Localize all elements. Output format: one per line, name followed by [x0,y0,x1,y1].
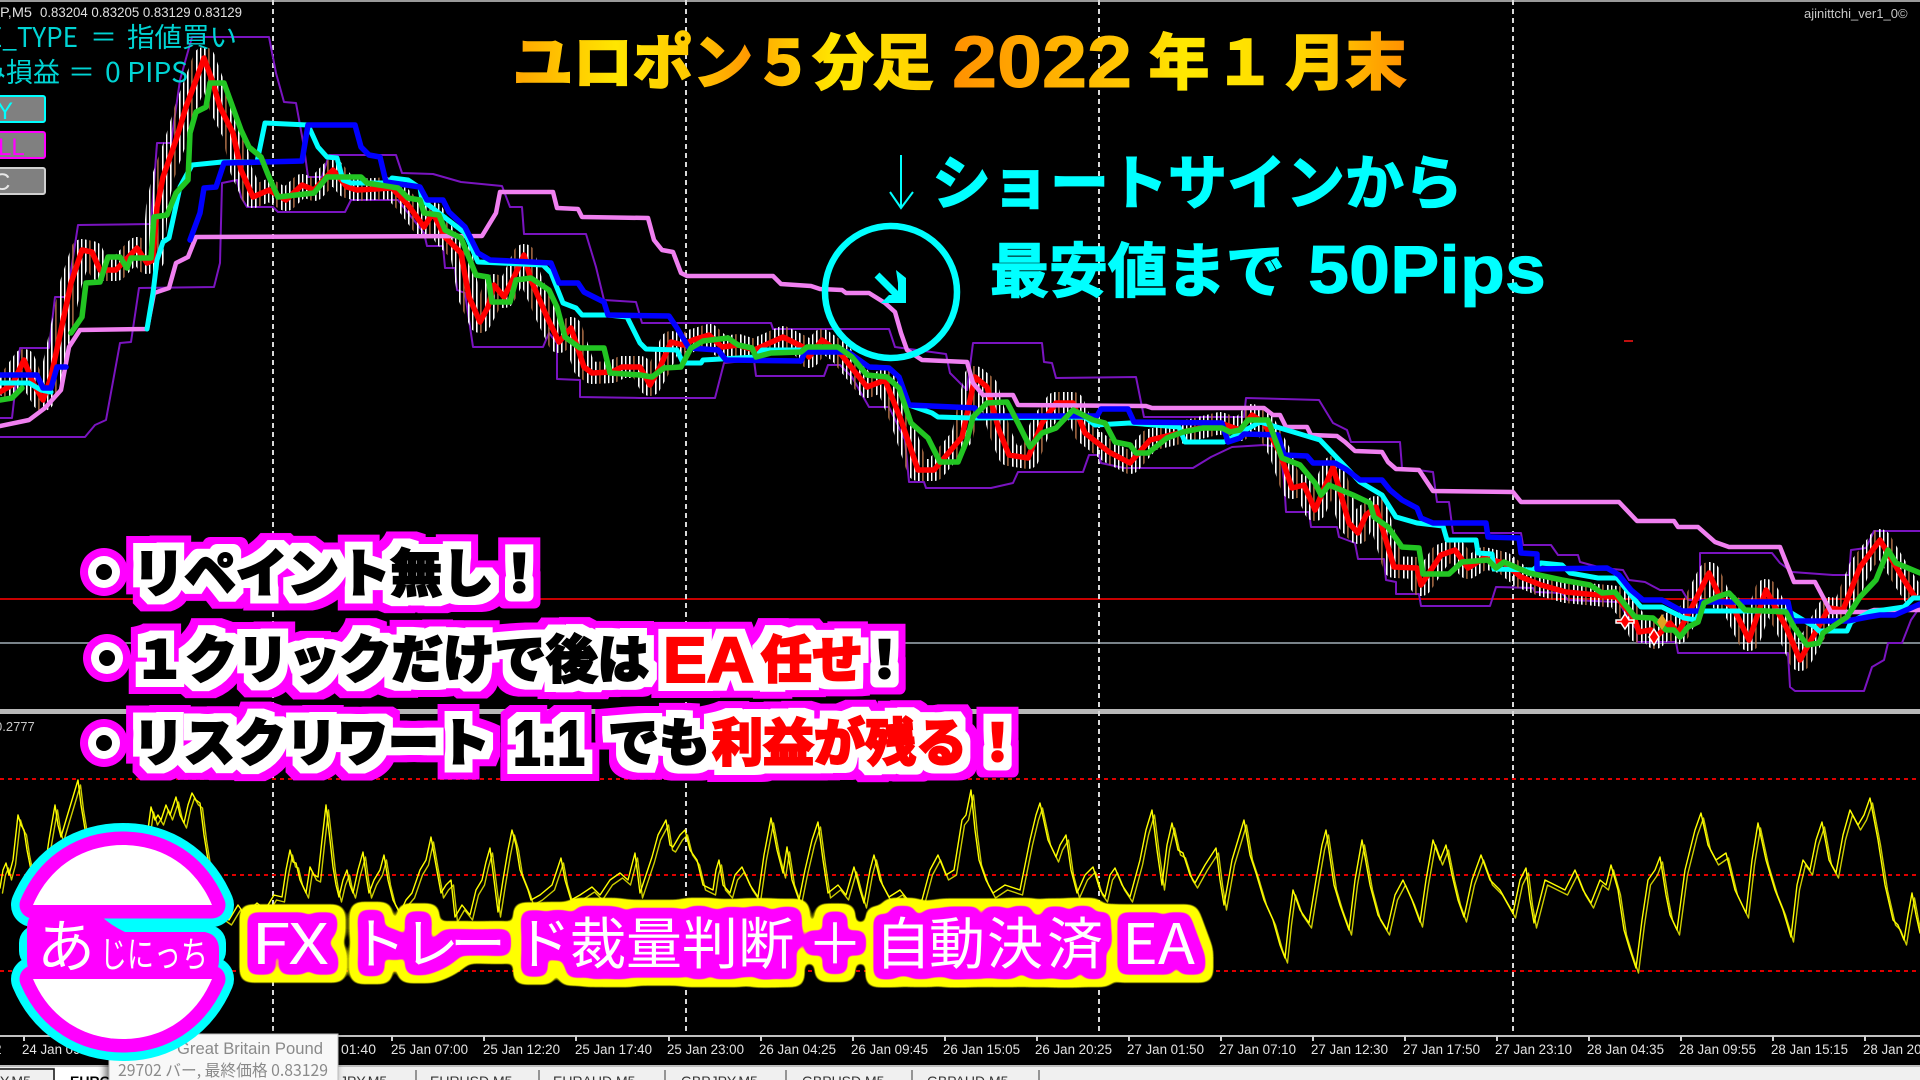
feature: one click: 任せ [761,619,863,693]
banner: FX trade discretion plus auto close EA: ト [350,900,406,981]
button: sell [0,132,45,161]
red fast average [0,58,1915,660]
logo top dome [33,845,212,905]
upper channel line [0,37,1920,600]
logo bottom dome [33,979,212,1039]
feature: risk reward [133,702,1023,779]
axis labels: 26 Jan 15:05 [943,1042,1020,1057]
feature: risk reward: リスクリワート [133,702,490,776]
feature list with outlined text [133,532,1023,779]
axis labels: 25 Jan 07:00 [391,1042,468,1057]
axis labels: 25 Jan 17:40 [575,1042,652,1057]
banner: FX trade discretion plus auto close EA: EA [1122,900,1195,981]
callout: short signal text line 2: 50Pips [1308,232,1546,308]
axis labels: 28 Jan 15:15 [1771,1042,1848,1057]
price chart: channel lines, candles and moving averages [0,37,1920,691]
chart header: symbol and prices: P,M5 [0,5,32,20]
arrow: down to signal [890,155,913,208]
callout: short signal text line 2 [990,224,1546,309]
blue average [0,125,1920,621]
signal markers [1616,614,1667,645]
axis labels: 24 Jan 09:00 [22,1042,99,1057]
axis labels: 27 Jan 17:50 [1403,1042,1480,1057]
oscillator level lines [0,779,1920,971]
axis ticks [24,1036,1865,1041]
title [513,15,1406,103]
banner: FX trade discretion plus auto close EA: ド [515,900,571,981]
axis labels: 27 Jan 23:10 [1495,1042,1572,1057]
feature: risk reward: 利益が残る [712,702,967,776]
banner: FX trade discretion plus auto close EA: 自 [875,900,931,981]
vertical period separators [273,0,1513,1035]
callout: short signal text line 1: ショートサインから [932,136,1463,221]
candlestick wicks [0,58,1915,660]
logo wordmark: じにっち [100,926,208,978]
bullet markers [80,548,131,767]
feature: one click: EA [663,624,754,696]
axis labels: 27 Jan 12:30 [1311,1042,1388,1057]
title: １ [1215,15,1275,102]
axis labels: 28 Jan 09:55 [1679,1042,1756,1057]
title: 月末 [1286,15,1406,102]
feature: risk reward: ！ [972,702,1023,776]
banner: FX trade discretion plus auto close EA: 決 [987,900,1043,981]
axis labels: 26 Jan 20:25 [1035,1042,1112,1057]
feature: risk reward: でも [608,702,710,776]
banner: FX trade discretion plus auto close EA: 済 [1047,900,1103,981]
feature: risk reward: 1:1 [513,707,585,779]
axis labels [0,1042,1920,1057]
axis labels: 26 Jan 09:45 [851,1042,928,1057]
chart header: symbol and prices: 0.83204 0.83205 0.83129 0.83129 [40,5,242,20]
axis labels: 26 Jan 04:25 [759,1042,836,1057]
banner: FX trade discretion plus auto close EA: ー [450,900,506,981]
tooltip [109,1034,338,1080]
banner: FX trade discretion plus auto close EA: 動 [929,900,985,981]
axis labels: 01:40 [341,1042,376,1057]
axis labels: 27 Jan 07:10 [1219,1042,1296,1057]
order type readout: ＝ [90,16,117,55]
feature: one click: ！ [859,619,910,693]
banner: FX trade discretion plus auto close EA: FX [251,900,329,981]
button: buy [0,96,45,125]
logo badge: ajinittchi [19,845,226,1039]
cyan average [0,123,1920,631]
logo wordmark: あ [37,900,95,984]
title: ユロポン５分足 [513,15,933,102]
button: close [0,168,45,196]
tooltip: Great Britain Pound [177,1039,323,1058]
profit and loss readout: 0 PIPS [105,51,188,90]
banner: FX trade discretion plus auto close EA: ＋ [807,900,863,981]
horizontal price levels [0,598,1920,714]
pink slow average [0,192,1920,612]
axis labels: 28 Jan 04:35 [1587,1042,1664,1057]
lower channel line [0,180,1920,691]
banner: FX trade discretion plus auto close EA: 裁量判断 [570,900,794,981]
signal circle with arrow icon [825,226,957,358]
axis labels: 25 Jan 23:00 [667,1042,744,1057]
feature: no repaint: リペイント無し！ [133,532,545,607]
time axis [0,1035,1920,1065]
symbol tab bar [0,1065,1920,1080]
profit and loss readout: ＝ [68,51,95,90]
oscillator trace [0,780,1920,973]
small red tick mark [1624,340,1633,342]
logo middle band [19,915,226,978]
order type readout: 指値買い [127,16,237,55]
axis labels: 27 Jan 01:50 [1127,1042,1204,1057]
title: 2022 [952,22,1132,103]
title: 年 [1149,15,1209,102]
axis labels: 25 Jan 12:20 [483,1042,560,1057]
oscillator subwindow [0,719,1920,973]
feature: one click [134,618,910,696]
green average [0,83,1920,645]
callout: short signal text line 2: 最安値まで [990,224,1285,309]
feature: one click: １クリックだけで後は [134,618,649,693]
top right tool label: ajinittchi_ver1_0© [1804,6,1908,21]
banner: FX trade discretion plus auto close EA: レ [403,900,459,981]
